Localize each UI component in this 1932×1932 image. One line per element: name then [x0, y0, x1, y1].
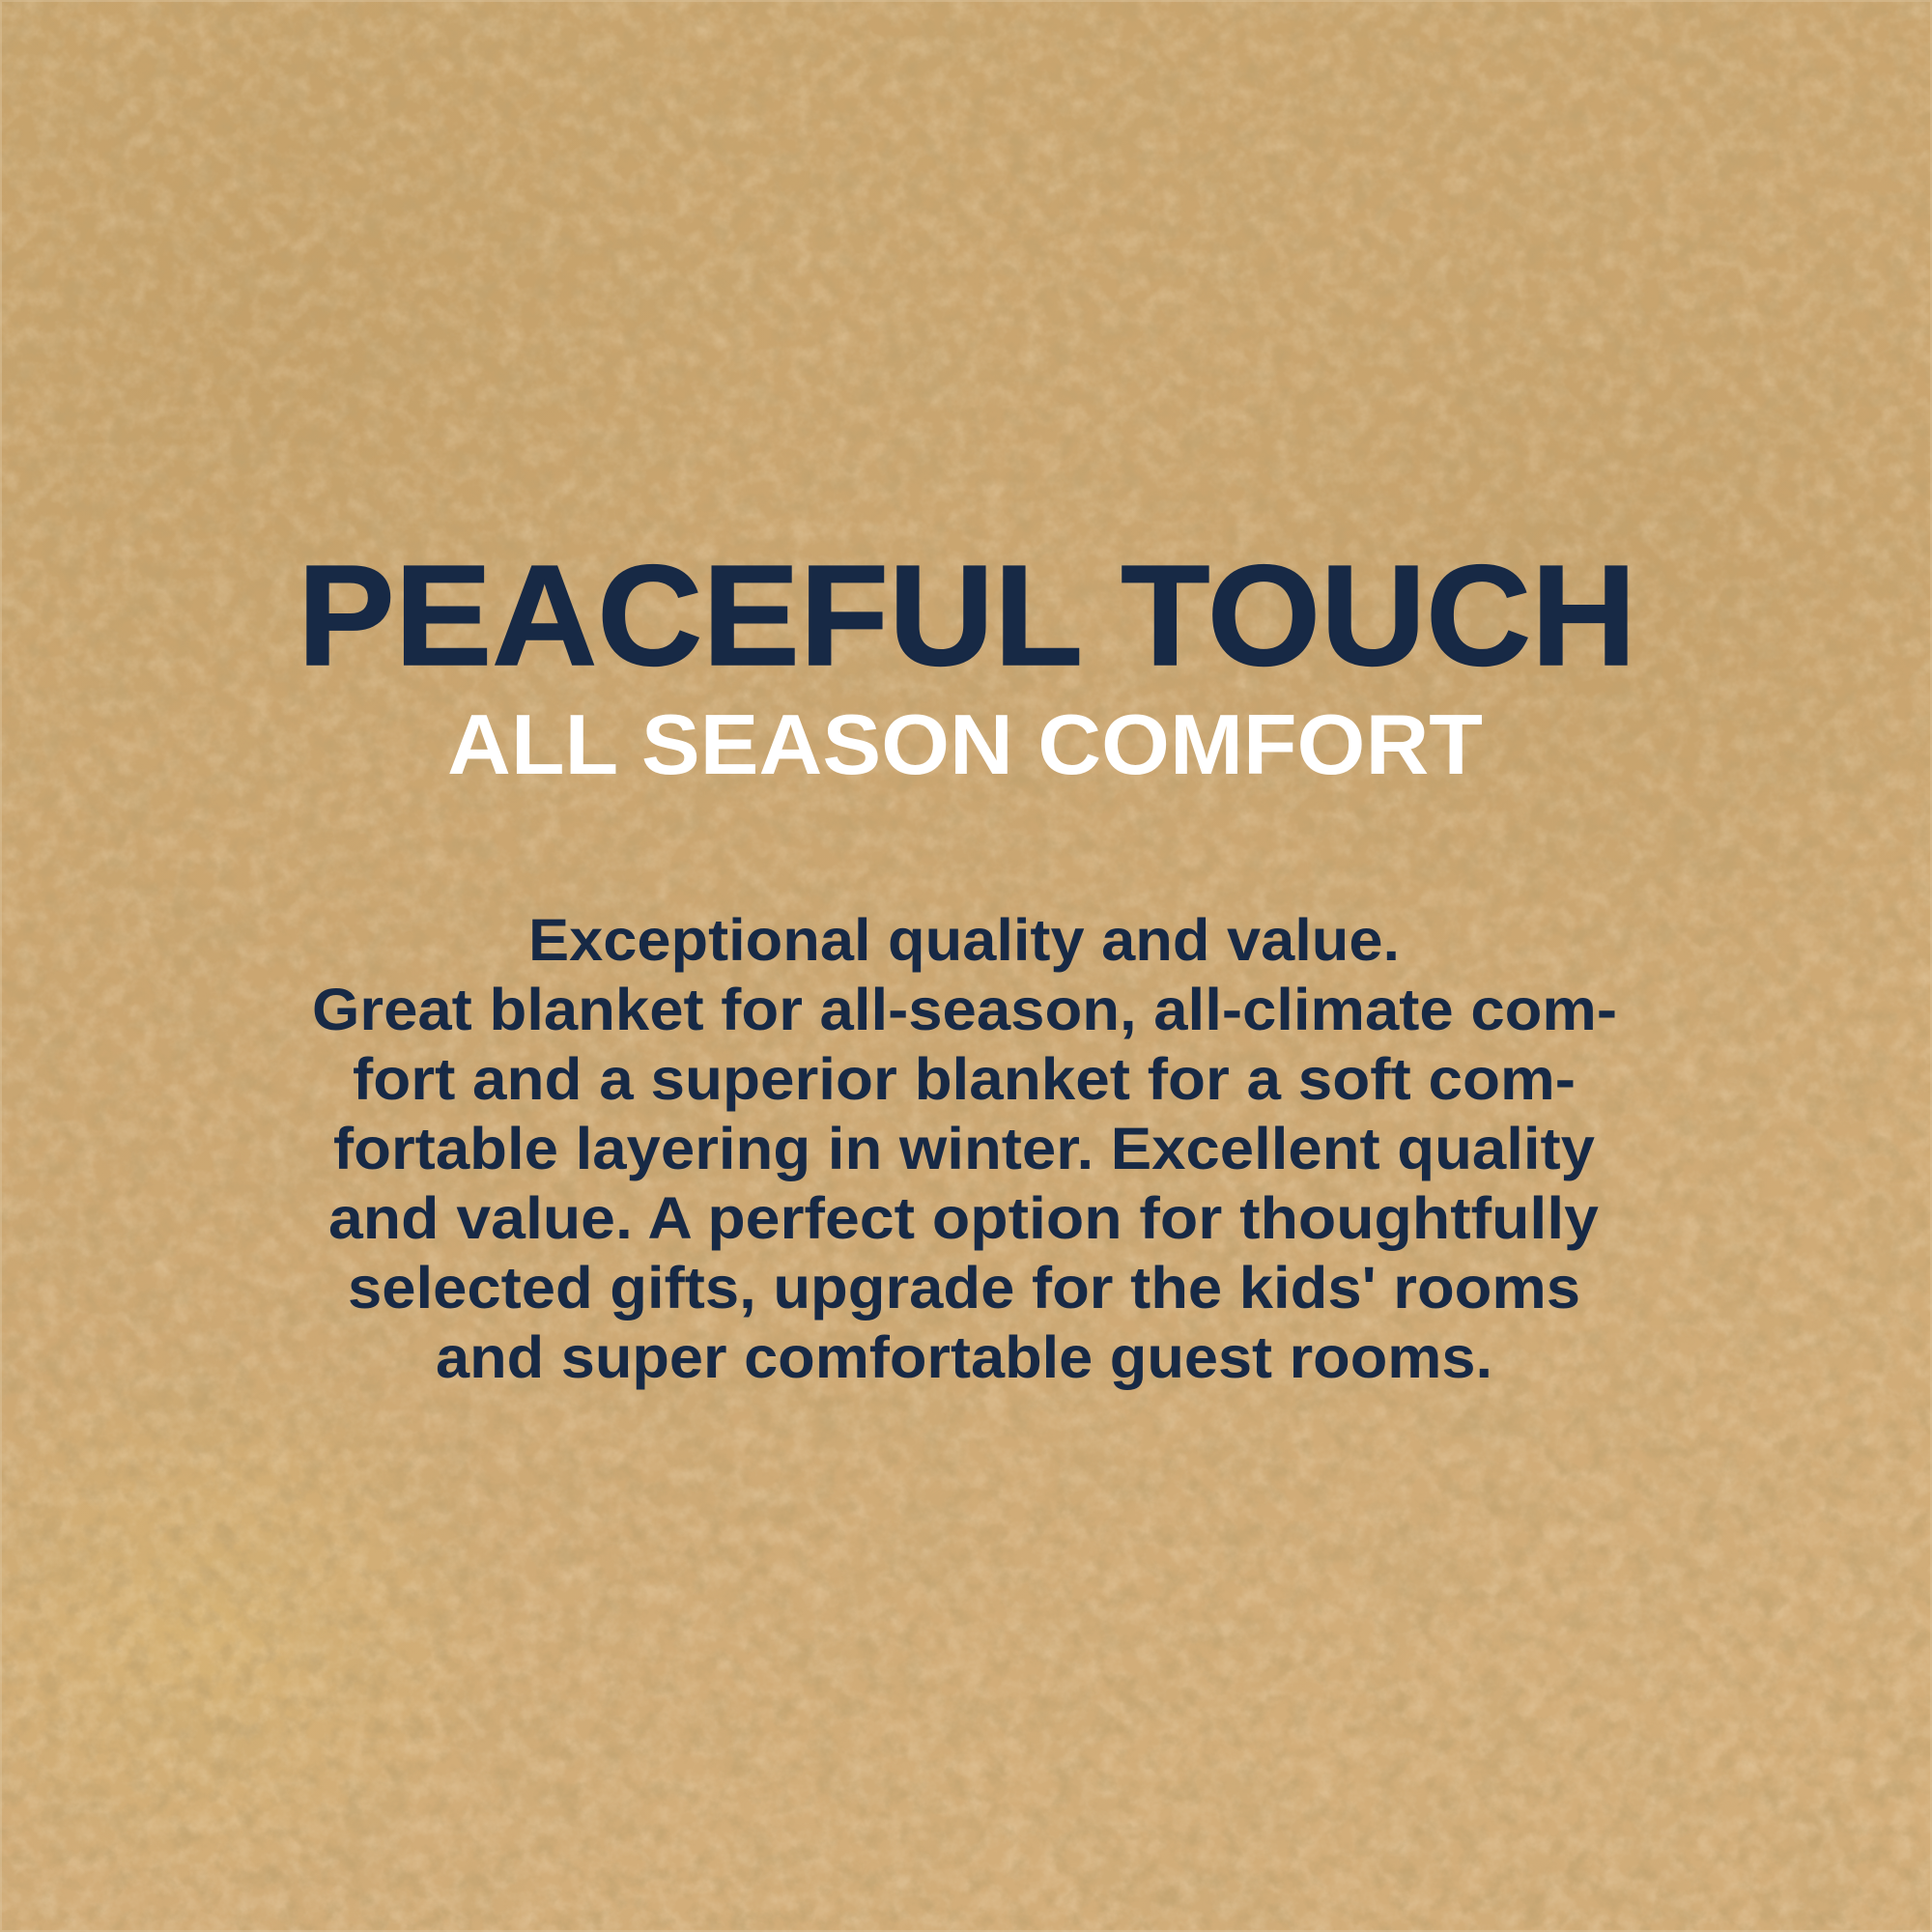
body text block: Great blanket for all-season, all-climate com- [312, 977, 1617, 1042]
body text block: and super comfortable guest rooms. [436, 1324, 1492, 1390]
body text block: fort and a superior blanket for a soft com- [353, 1046, 1576, 1112]
body text block: fortable layering in winter. Excellent quality [333, 1116, 1595, 1181]
body text block: selected gifts, upgrade for the kids' rooms [348, 1255, 1580, 1321]
body text block: Exceptional quality and value. [528, 907, 1400, 973]
subtitle: ALL SEASON COMFORT [447, 696, 1483, 792]
body text block: and value. A perfect option for thoughtfully [328, 1185, 1599, 1251]
body text block [312, 907, 1617, 1390]
title: PEACEFUL TOUCH [298, 536, 1636, 696]
